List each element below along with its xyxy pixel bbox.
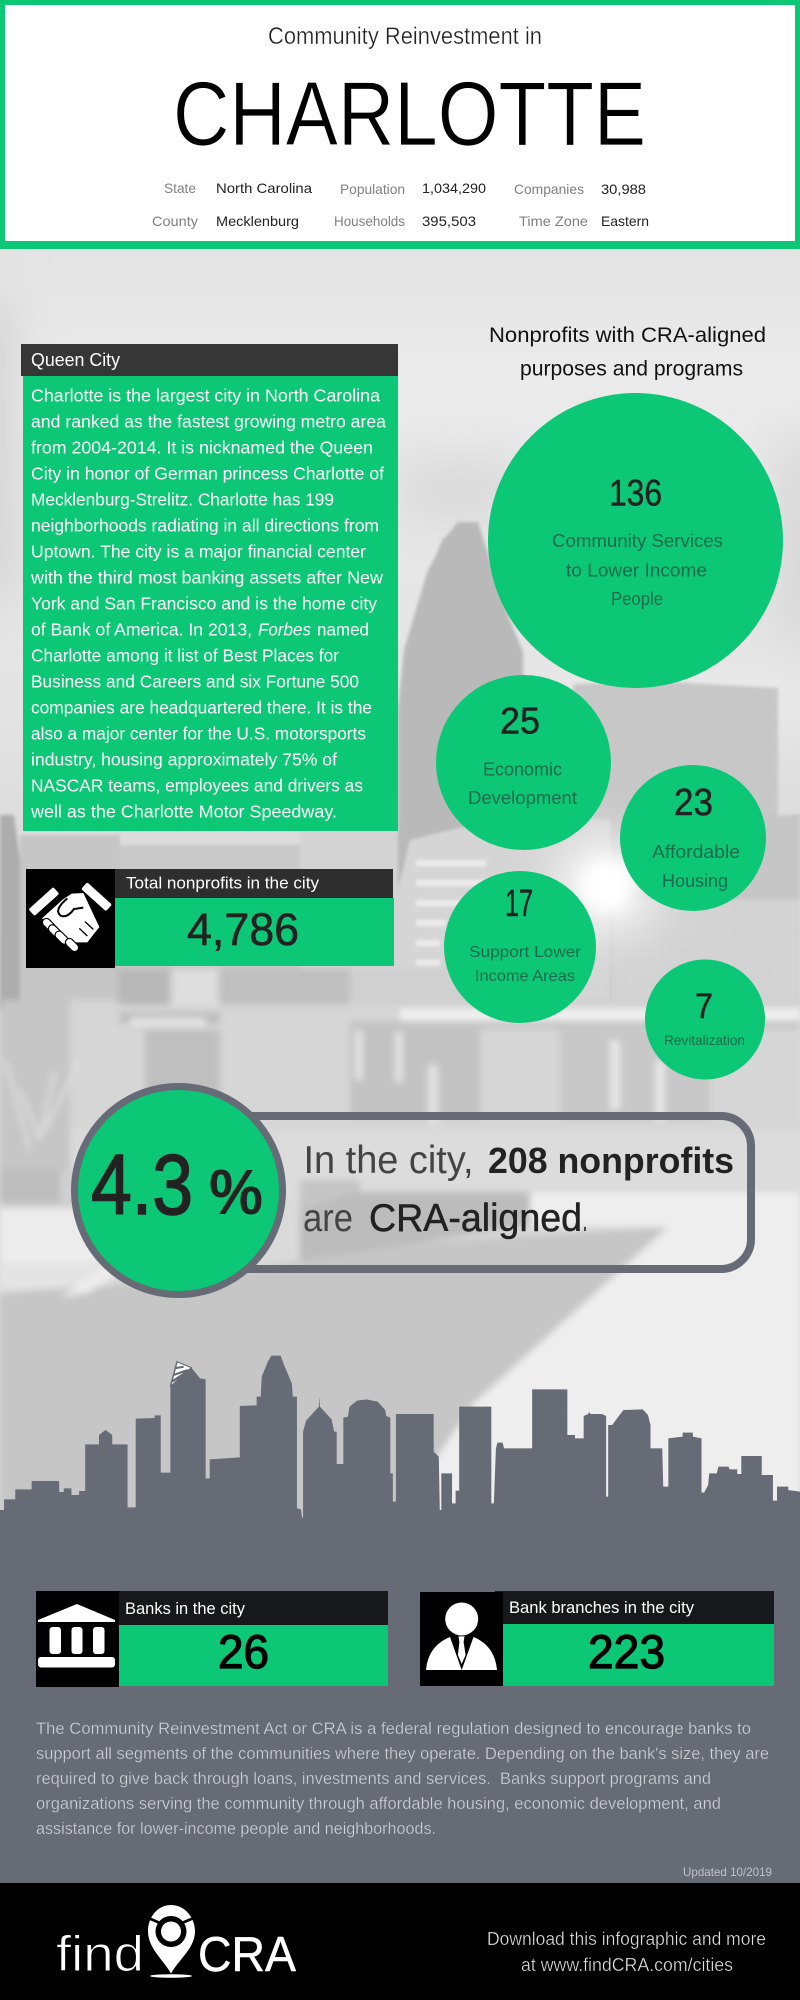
- callout text: .: [582, 1197, 588, 1240]
- stat card: bank branches in the city: 223: [588, 1625, 665, 1678]
- icon: handshake: [28, 882, 112, 953]
- stats grid: County: [152, 213, 198, 229]
- stat card: banks in the city: Banks in the city: [125, 1599, 245, 1618]
- stat card: bank branches in the city: [420, 1591, 774, 1686]
- icon: bank building: [38, 1604, 115, 1668]
- panel body text: with the third most banking assets after New: [30, 568, 383, 588]
- stats grid: [152, 180, 649, 229]
- stats grid: 1,034,290: [422, 180, 486, 196]
- bubble: revitalization: [645, 960, 765, 1080]
- icon: person in suit: [426, 1602, 497, 1670]
- panel body text: Business and Careers and six Fortune 500: [31, 672, 359, 692]
- bubble: support lower income areas: [444, 871, 596, 1023]
- bubble: affordable housing: 23: [674, 782, 713, 824]
- bubble: community services: [488, 393, 783, 688]
- bubble: economic development: [436, 675, 611, 850]
- stat card: banks in the city: [36, 1591, 388, 1687]
- card label: Total nonprofits in the city: [126, 874, 319, 892]
- panel body text: well as the Charlotte Motor Speedway.: [30, 802, 337, 822]
- panel body text: NASCAR teams, employees and drivers as: [31, 776, 363, 796]
- panel body text: industry, housing approximately 75% of: [31, 750, 337, 770]
- callout: 4.3% CRA-aligned: %: [209, 1156, 263, 1228]
- logo: findCRA: find: [56, 1926, 144, 1982]
- callout text: are: [303, 1197, 353, 1240]
- text block: about the CRA: [36, 1720, 769, 1838]
- stats grid: North Carolina: [216, 180, 312, 196]
- callout: 4.3% CRA-aligned: [74, 1086, 751, 1294]
- logo: findCRA: [56, 1905, 296, 1982]
- stat card: total nonprofits: [26, 869, 394, 968]
- panel body text: from 2004-2014. It is nicknamed the Queen: [31, 438, 373, 458]
- skyline silhouette: [0, 1356, 800, 1883]
- callout text: In the city,: [304, 1139, 474, 1182]
- panel body text: and ranked as the fastest growing metro area: [31, 412, 386, 432]
- callout text: CRA-aligned: [369, 1197, 582, 1240]
- bubble: support lower income areas: Support Lower: [469, 944, 582, 961]
- panel body text: York and San Francisco and is the home city: [31, 594, 377, 614]
- footer call to action: Download this infographic and more: [487, 1929, 766, 1949]
- panel body text: named: [317, 620, 369, 640]
- panel body text: City in honor of German princess Charlotte of: [31, 464, 384, 484]
- stats grid: Eastern: [601, 213, 649, 229]
- stats grid: Time Zone: [519, 213, 588, 229]
- stats grid: Households: [334, 213, 405, 229]
- stats grid: 395,503: [422, 213, 476, 229]
- city title: CHARLOTTE: [173, 64, 646, 165]
- bubble: community services: to Lower Income: [566, 560, 707, 580]
- panel: Queen City: [21, 344, 398, 831]
- bubble: revitalization: Revitalization: [664, 1032, 745, 1048]
- heading: nonprofits with CRA-aligned purposes: Nonprofits with CRA-aligned: [489, 323, 766, 347]
- bubble: support lower income areas: 17: [505, 883, 533, 925]
- bubble: revitalization: 7: [695, 987, 713, 1026]
- stats grid: State: [164, 180, 196, 196]
- bubble: affordable housing: Housing: [662, 870, 728, 891]
- panel body text: Forbes: [258, 620, 311, 640]
- subtitle: Community Reinvestment in: [268, 23, 542, 50]
- panel body text: also a major center for the U.S. motorsports: [31, 724, 366, 744]
- bubble: community services: People: [611, 588, 663, 609]
- percentage: 4.3: [91, 1138, 193, 1233]
- panel body text: of Bank of America. In 2013,: [31, 620, 252, 640]
- text block: about the CRA: required to give back through loans, investments and services. Banks support programs and: [36, 1770, 711, 1788]
- footer call to action: [487, 1929, 766, 1975]
- bubble: community services: Community Services: [552, 530, 723, 551]
- bubble: affordable housing: Affordable: [652, 841, 740, 862]
- background photo: blurred Charlotte street scene: [0, 249, 800, 1540]
- panel body text: Mecklenburg-Strelitz. Charlotte has 199: [31, 490, 334, 510]
- panel body text: [30, 386, 386, 822]
- stats grid: Mecklenburg: [216, 213, 299, 229]
- logo: findCRA: CRA: [198, 1928, 296, 1982]
- panel heading: Queen City: [31, 350, 120, 370]
- callout text: [303, 1139, 734, 1240]
- text block: about the CRA: support all segments of the communities where they operate. Depending on the bank's size, they are: [36, 1745, 769, 1763]
- header panel: [0, 0, 800, 249]
- bubble: economic development: 25: [500, 701, 540, 742]
- panel body text: neighborhoods radiating in all directions from: [31, 516, 379, 536]
- callout text: 208 nonprofits: [488, 1140, 734, 1181]
- card value: 4,786: [187, 904, 299, 955]
- footer: [0, 1883, 800, 2000]
- text block: about the CRA: The Community Reinvestment Act or CRA is a federal regulation designed to encourage banks to: [36, 1720, 751, 1738]
- bubble: affordable housing: [620, 765, 766, 911]
- bubble: support lower income areas: Income Areas: [475, 968, 575, 985]
- icon: map pin with person: [146, 1905, 196, 1978]
- stat card: bank branches in the city: Bank branches in the city: [509, 1598, 694, 1617]
- bubble: community services: 136: [609, 473, 662, 514]
- stats grid: Companies: [514, 181, 584, 197]
- stats grid: Population: [340, 181, 405, 197]
- bubble: economic development: Economic: [483, 758, 562, 780]
- bubble: economic development: Development: [468, 787, 577, 808]
- panel body text: Charlotte is the largest city in North Carolina: [31, 386, 380, 406]
- heading: nonprofits with CRA-aligned purposes: [489, 323, 766, 380]
- stat card: banks in the city: 26: [218, 1625, 269, 1678]
- heading: nonprofits with CRA-aligned purposes: purposes and programs: [520, 356, 743, 380]
- stats grid: 30,988: [601, 181, 646, 197]
- text block: about the CRA: assistance for lower-income people and neighborhoods.: [36, 1820, 436, 1838]
- footer call to action: at www.findCRA.com/cities: [521, 1955, 733, 1975]
- panel body text: Charlotte among it list of Best Places for: [31, 646, 339, 666]
- updated date: Updated 10/2019: [683, 1865, 772, 1879]
- panel body text: companies are headquartered there. It is the: [31, 698, 372, 718]
- text block: about the CRA: organizations serving the community through affordable housing, economic development, and: [36, 1795, 721, 1813]
- panel body text: Uptown. The city is a major financial center: [31, 542, 366, 562]
